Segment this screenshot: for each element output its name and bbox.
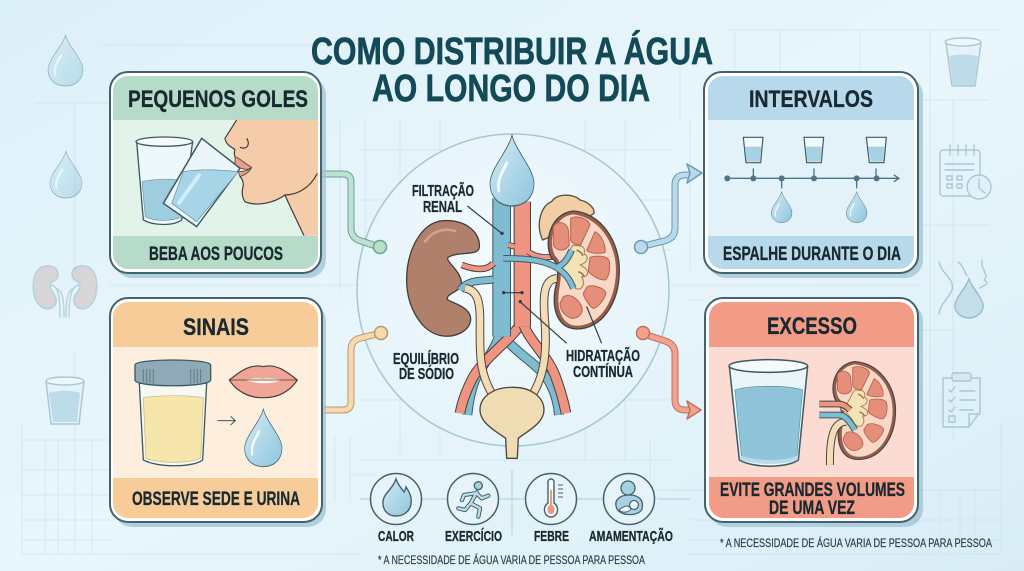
illustration: urine jar, lips and drop (135, 360, 297, 467)
title (311, 29, 713, 110)
label: equilíbrio de sódio: DE SÓDIO (399, 364, 454, 383)
decorative icon: drop left (50, 151, 82, 198)
connector: sinais (323, 326, 388, 410)
caption: evite grandes volumes de uma vez: DE UMA VEZ (769, 498, 855, 519)
caption: evite grandes volumes de uma vez (720, 480, 905, 519)
label: filtração renal: FILTRAÇÃO (412, 180, 474, 200)
heading: pequenos goles: PEQUENOS GOLES (128, 86, 308, 113)
right kidney with adrenal gland (539, 195, 619, 329)
icon: calor (370, 474, 422, 524)
decorative icon: drop with waves (939, 260, 987, 318)
label: equilíbrio de sódio (393, 349, 459, 383)
central water drop (490, 135, 534, 206)
illustration: large glass and kidney (729, 360, 896, 466)
caption: beba aos poucos: BEBA AOS POUCOS (149, 244, 283, 265)
label: hidratação contínua: HIDRATAÇÃO (566, 345, 640, 365)
decorative icon: drop top left (48, 35, 83, 86)
caption: espalhe durante o dia: ESPALHE DURANTE O DIA (723, 244, 901, 265)
decorative icon: glass right (945, 38, 981, 86)
title: COMO DISTRIBUIR A ÁGUA (311, 29, 713, 73)
factor labels: EXERCÍCIO (445, 528, 502, 545)
label: hidratação contínua (566, 345, 640, 381)
icon: febre (526, 474, 576, 524)
arrow: intervalos (634, 164, 702, 254)
factor labels (378, 527, 673, 545)
central anatomy circle (357, 134, 669, 458)
icon: exercício (448, 474, 498, 524)
label: equilíbrio de sódio: EQUILÍBRIO (393, 349, 459, 368)
illustration: person drinking from a glass (136, 120, 318, 236)
caption: evite grandes volumes de uma vez: EVITE GRANDES VOLUMES (720, 480, 905, 501)
heading: excesso: EXCESSO (767, 313, 857, 340)
bladder (480, 387, 544, 458)
decorative icon: calendar and clock (940, 145, 991, 199)
factor labels: FEBRE (534, 528, 569, 545)
factors row (360, 470, 690, 545)
arrow: excesso (636, 326, 701, 419)
kidneys, vessels and bladder illustration (407, 195, 619, 458)
label: hidratação contínua: CONTÍNUA (573, 362, 633, 381)
decorative icon: clipboard (943, 373, 980, 427)
illustration: timeline with glasses and drops (724, 137, 899, 223)
panel: pequenos goles (110, 72, 326, 278)
heading: intervalos: INTERVALOS (749, 86, 873, 113)
factor labels: AMAMENTAÇÃO (589, 527, 673, 545)
label: filtração renal: RENAL (423, 199, 462, 216)
heading: sinais: SINAIS (183, 314, 249, 341)
title: AO LONGO DO DIA (372, 68, 650, 110)
left kidney (407, 221, 479, 336)
factor labels: CALOR (378, 528, 414, 545)
panel: intervalos (704, 72, 923, 278)
decorative icon: glass left (46, 377, 84, 424)
label: filtração renal (412, 180, 474, 216)
footnote centre: * A NECESSIDADE DE ÁGUA VARIA DE PESSOA PARA PESSOA (378, 552, 645, 567)
decorative icon: kidneys left (33, 266, 97, 317)
panel: sinais (110, 298, 326, 527)
icon: amamentação (604, 474, 654, 524)
caption: observe sede e urina: OBSERVE SEDE E URINA (132, 489, 300, 510)
panel: excesso (705, 298, 923, 527)
connector: pequenos goles (322, 174, 386, 254)
